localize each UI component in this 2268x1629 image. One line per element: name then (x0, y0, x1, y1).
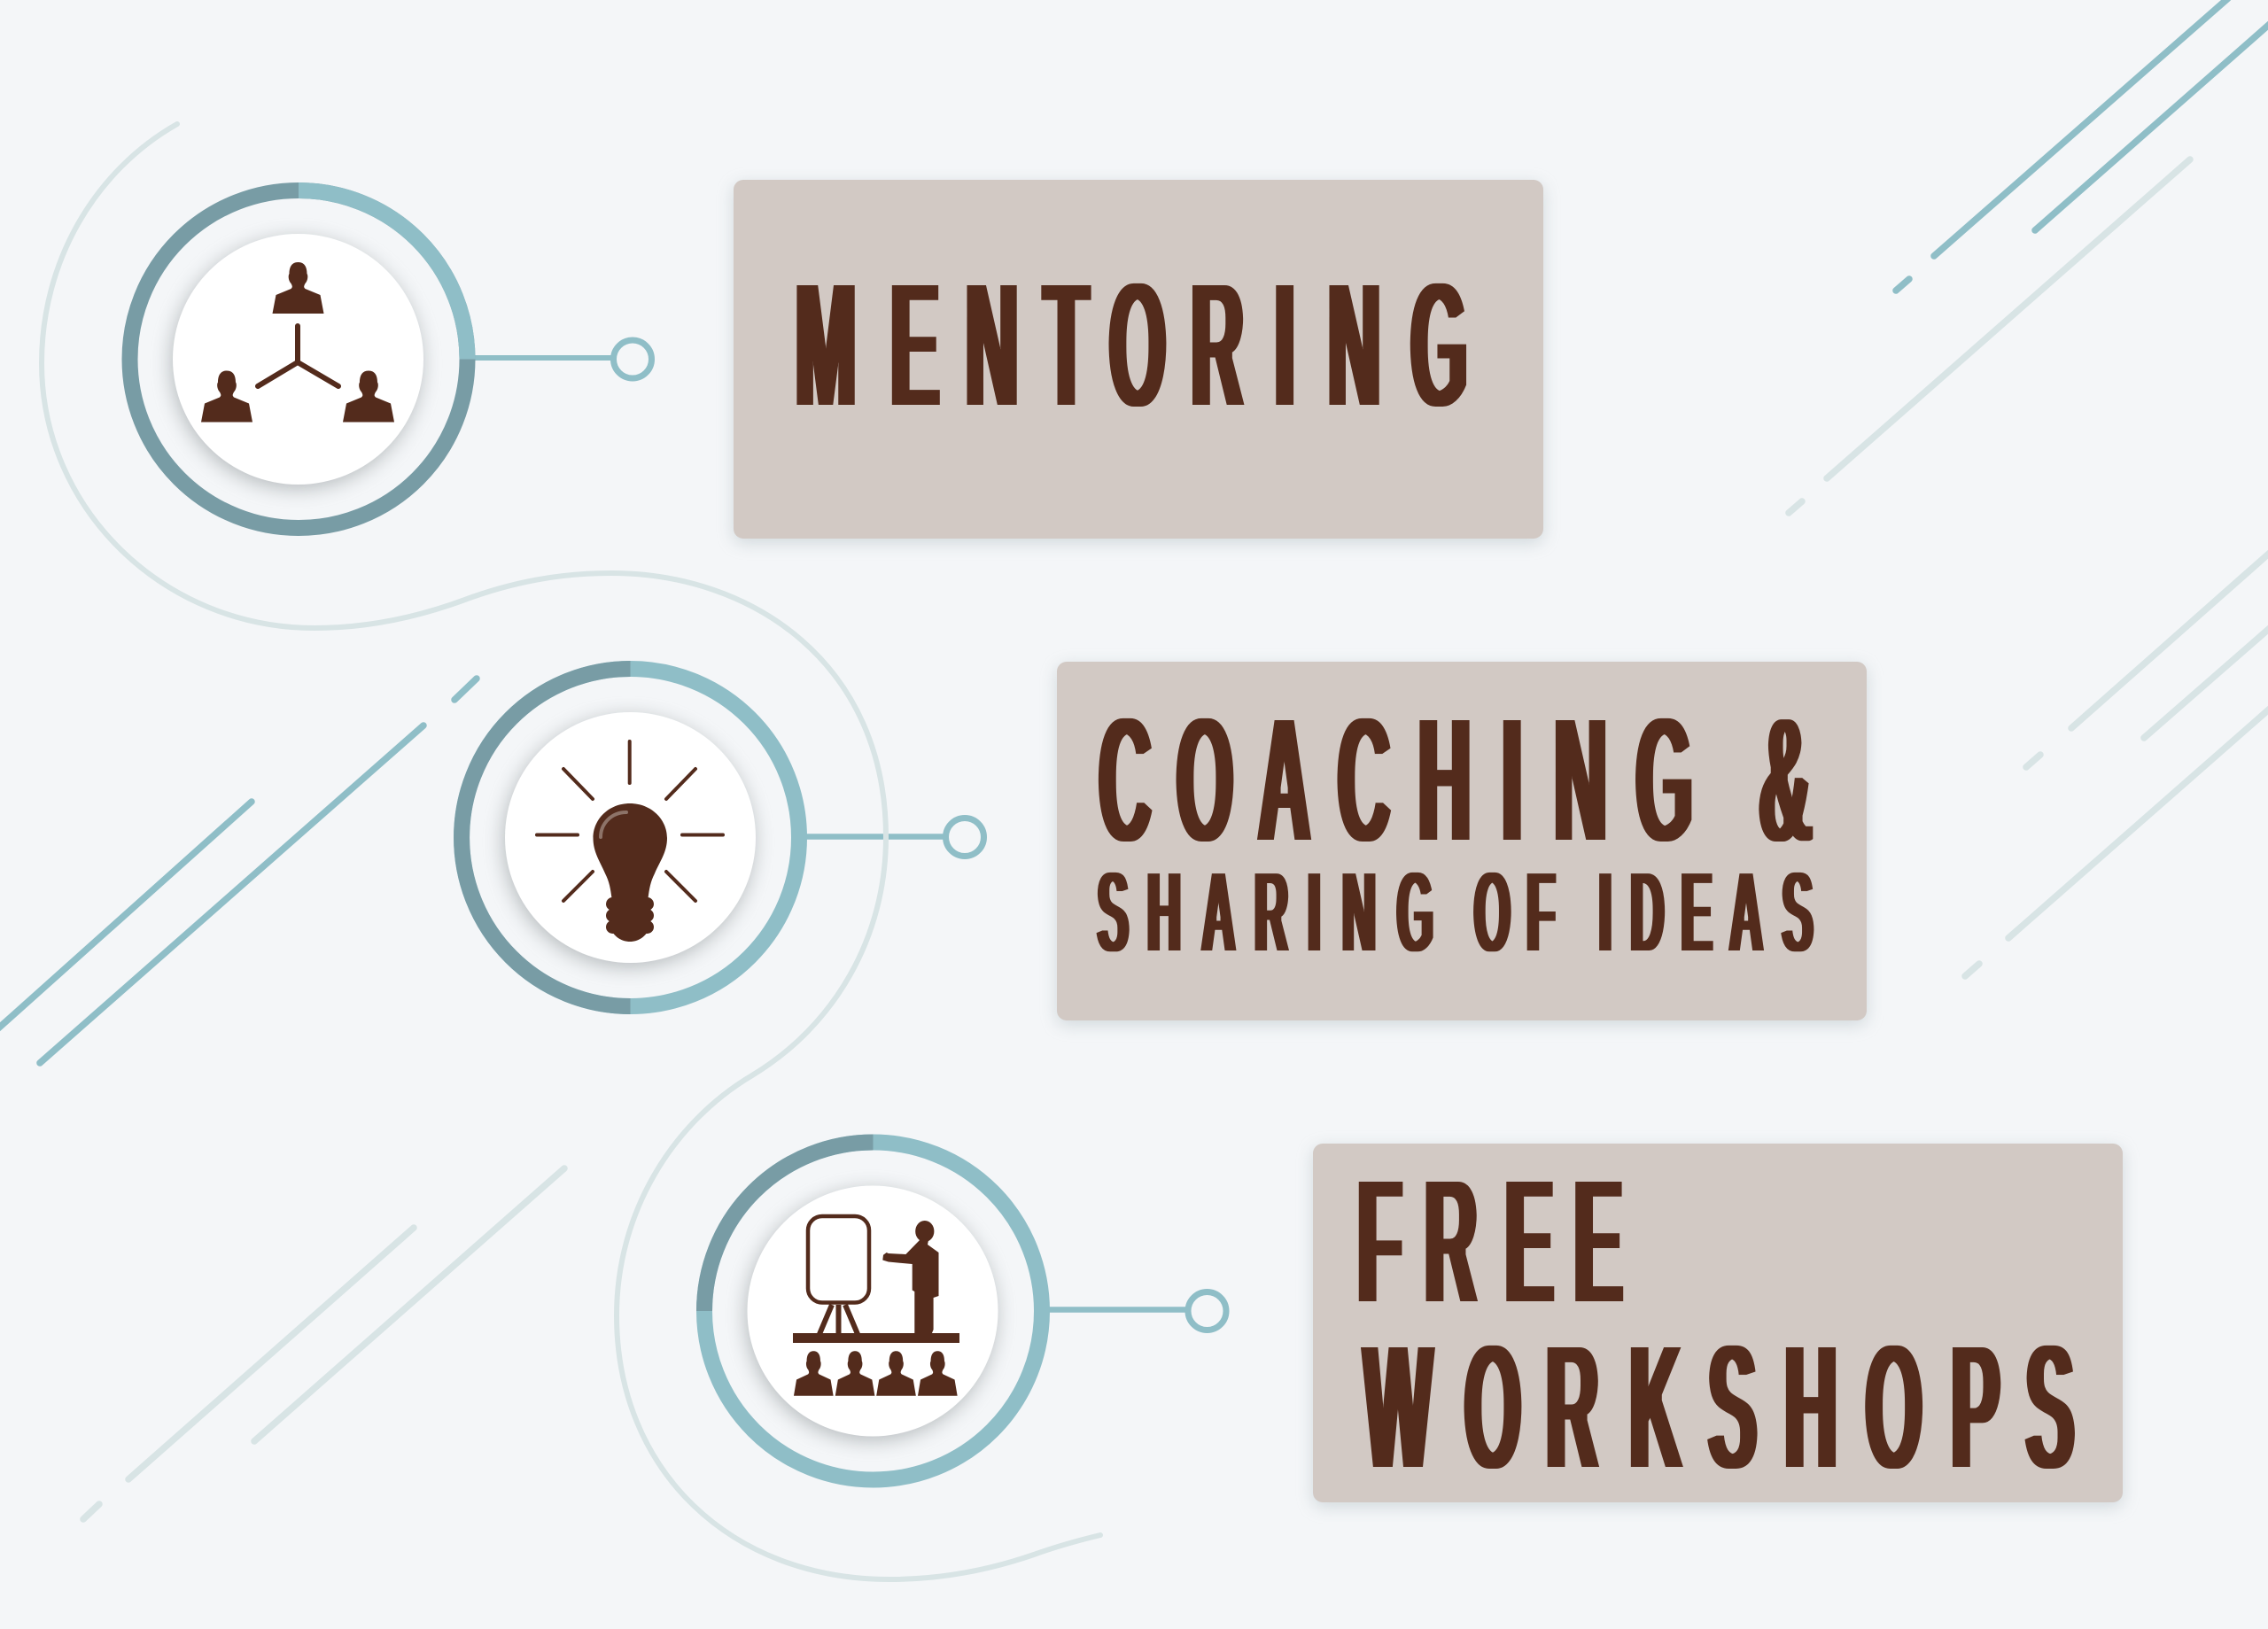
icon: three connected people (201, 262, 394, 422)
heading: workshops: WORKSHOPS (1363, 1306, 2074, 1509)
connector: mentoring (470, 340, 652, 378)
subheading: sharing of ideas: SHARING OF IDEAS (1098, 847, 1814, 977)
decorative diagonal lines: left middle (0, 679, 477, 1063)
white disc: mentoring (173, 234, 423, 485)
ring: workshops (704, 1143, 1042, 1479)
heading: coaching: COACHING & (1099, 679, 1812, 881)
decorative diagonal lines: bottom left (83, 1168, 564, 1519)
decorative diagonal lines: right middle (1965, 553, 2268, 976)
icon: light bulb (537, 741, 723, 942)
heading: mentoring: MENTORING (796, 244, 1467, 446)
panel: mentoring (734, 180, 1543, 539)
connector: workshops (1045, 1292, 1226, 1330)
panel: coaching and sharing of ideas (1057, 662, 1867, 1020)
white disc: workshops (748, 1185, 998, 1437)
icon: presenter with audience (793, 1216, 959, 1396)
winding curve (42, 124, 1100, 1579)
ring: coaching (462, 669, 799, 1006)
ring: mentoring (129, 190, 468, 528)
white disc: coaching (505, 712, 756, 963)
connector: coaching (802, 818, 983, 856)
decorative diagonal lines: top right (1789, 0, 2268, 513)
panel: free workshops (1313, 1140, 2123, 1509)
heading: free: FREE (1357, 1140, 1622, 1343)
